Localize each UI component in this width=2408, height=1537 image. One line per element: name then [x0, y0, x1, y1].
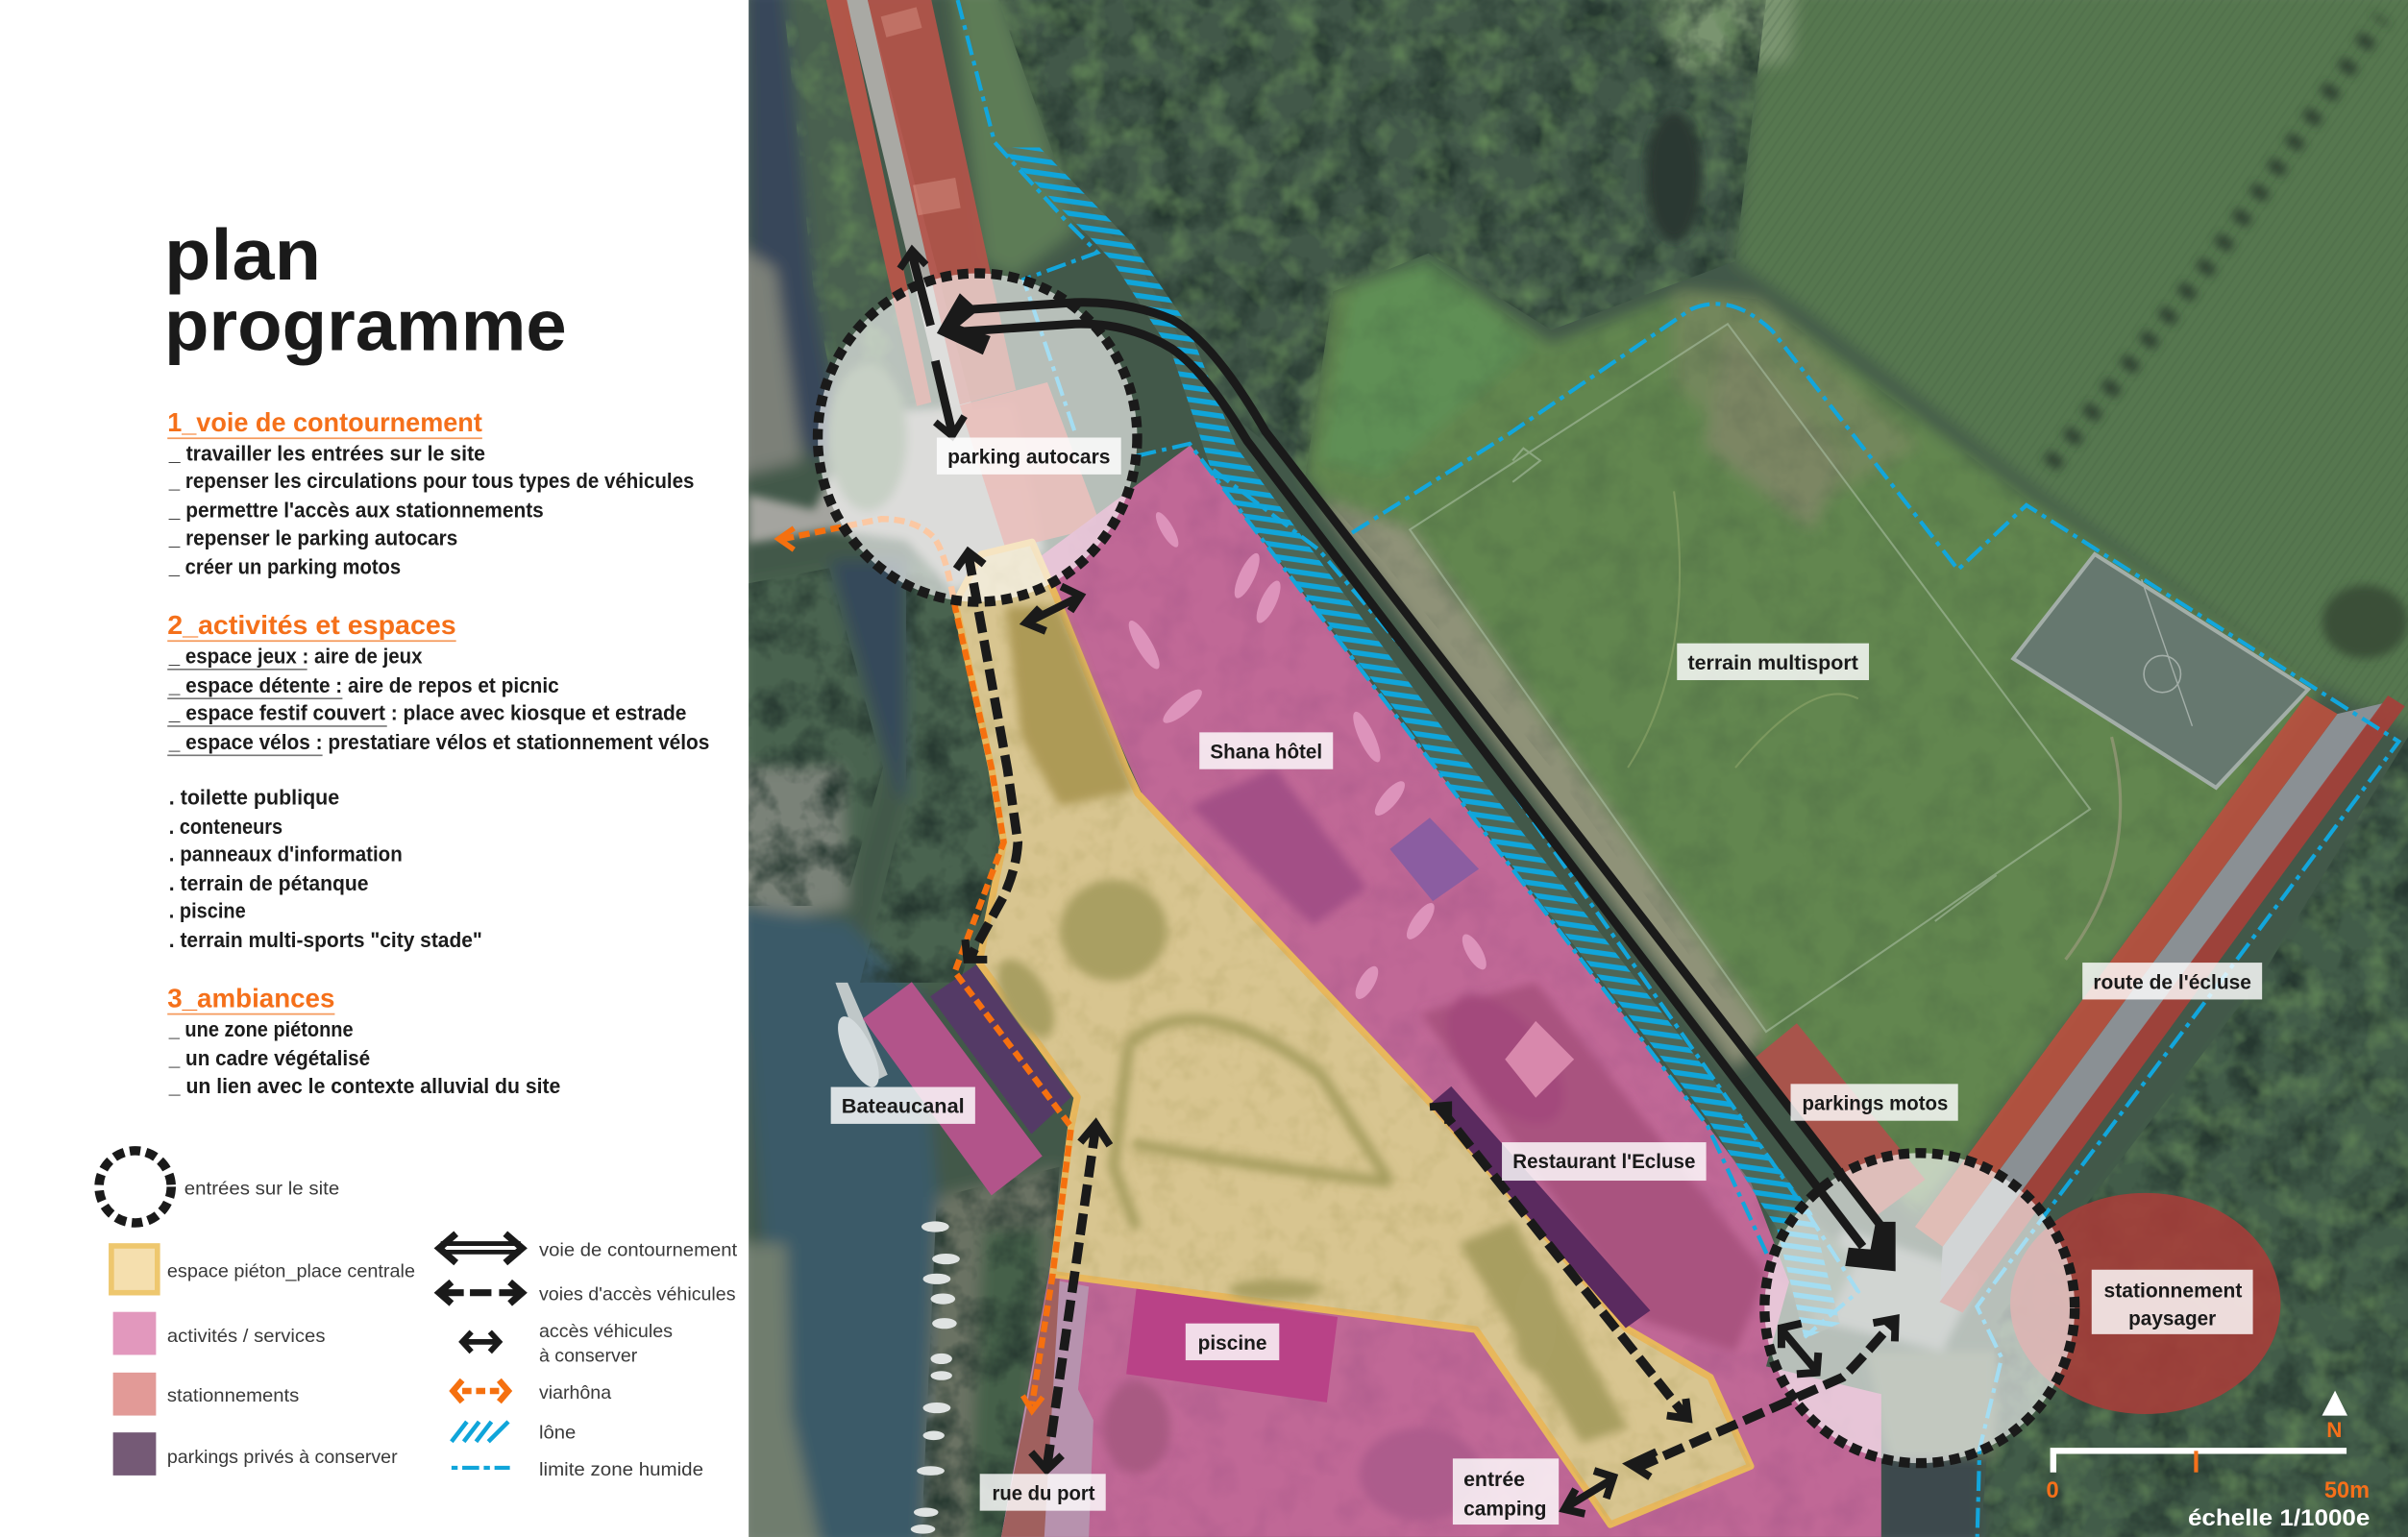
label: stationnement paysager	[2092, 1270, 2253, 1334]
marina boats and pier	[829, 983, 960, 1534]
stationnement zone: north road	[826, 0, 1101, 549]
arrowhead: north-west	[937, 293, 991, 354]
title: plan	[164, 214, 321, 295]
arrow: parking autocars	[900, 251, 965, 436]
legend	[99, 1151, 738, 1480]
text block: objectives: _ travailler les entrées sur le site	[168, 441, 485, 465]
label: parking autocars	[937, 438, 1121, 475]
label: Bateaucanal: Bateaucanal	[842, 1095, 965, 1118]
label: Shana hôtel	[1199, 732, 1333, 769]
heading: 2_activités et espaces	[167, 610, 456, 640]
zone: parking privé central	[930, 964, 1071, 1134]
crop field stripes and tree row	[1758, 0, 1795, 63]
text block: espaces	[167, 644, 709, 755]
legend: activités / services: activités / services	[167, 1327, 326, 1347]
text block: équipements: . toilette publique	[169, 785, 339, 809]
legend: viarhôna: viarhôna	[539, 1383, 611, 1403]
legend: accès véhicules à conserver: à conserver	[539, 1347, 638, 1367]
lône hatching	[999, 147, 1840, 1339]
section 1: voie de contournement	[167, 407, 694, 579]
legend: voie de contournement	[439, 1233, 738, 1263]
legend: lône	[452, 1422, 576, 1444]
title	[164, 214, 567, 365]
arrow: le long du restaurant	[1430, 1106, 1688, 1419]
legend: stationnements: stationnements	[167, 1386, 299, 1406]
heading: 3_ambiances	[167, 983, 334, 1012]
zone: parking privé restaurant	[1430, 1086, 1650, 1328]
zone: piscine	[1126, 1288, 1338, 1403]
text block: équipements: . piscine	[169, 899, 246, 923]
legend: lône: lône	[539, 1424, 576, 1444]
limite zone humide	[958, 0, 2398, 1537]
scale bar: 0	[2046, 1477, 2059, 1503]
panel: aerial map	[737, 0, 2408, 1537]
text block: espaces: _ espace festif couvert : place avec kiosque et estrade	[168, 701, 686, 725]
legend: parkings privés: parkings privés à conserver	[167, 1448, 398, 1468]
text block: objectives: _ repenser le parking autocars	[168, 525, 457, 549]
label: entrée camping: camping	[1463, 1497, 1546, 1520]
legend: espace piéton	[111, 1246, 415, 1293]
text block: objectives: _ permettre l'accès aux stationnements	[168, 499, 544, 523]
label: terrain multisport	[1677, 644, 1869, 680]
scale bar	[2046, 1451, 2370, 1531]
label: Restaurant l'Ecluse: Restaurant l'Ecluse	[1512, 1150, 1696, 1173]
legend: limite zone humide: limite zone humide	[539, 1460, 703, 1480]
label: stationnement paysager: stationnement	[2104, 1280, 2242, 1303]
aerial photo base	[737, 0, 2408, 1537]
scale bar: échelle 1/1000e	[2188, 1505, 2370, 1531]
title: programme	[164, 284, 567, 365]
legend: voie de contournement: voie de contournement	[539, 1240, 738, 1260]
label: parking autocars: parking autocars	[947, 446, 1111, 469]
arrow: entrée est	[1630, 1319, 1896, 1476]
text block: ambiances: _ une zone piétonne	[168, 1017, 354, 1041]
label: Shana hôtel: Shana hôtel	[1210, 741, 1322, 764]
label: rue du port	[980, 1474, 1106, 1511]
text block: espaces: _ espace jeux : aire de jeux	[168, 644, 423, 668]
zone: Bateaucanal	[863, 982, 1043, 1195]
legend: voies d'accès véhicules	[439, 1282, 736, 1305]
label: entrée camping	[1453, 1458, 1559, 1525]
label: route de l'écluse	[2082, 963, 2262, 999]
label: piscine: piscine	[1198, 1331, 1267, 1354]
legend: entrées sur le site	[99, 1151, 339, 1223]
multisport court	[2013, 554, 2308, 788]
activités / services zones	[1001, 445, 1881, 1537]
arrowhead: south-east	[1845, 1222, 1896, 1271]
label: rue du port: rue du port	[992, 1481, 1095, 1504]
section 2: activités et espaces	[167, 610, 709, 952]
label: terrain multisport: terrain multisport	[1687, 651, 1858, 674]
text block: équipements	[169, 785, 482, 952]
legend: parkings privés	[113, 1432, 398, 1476]
text block: espaces: _ espace détente : aire de repos et picnic	[168, 673, 559, 697]
accès véhicules à conserver	[1026, 587, 1818, 1514]
viarhôna route	[778, 519, 1071, 1411]
section 3: ambiances	[167, 983, 560, 1098]
label: Bateaucanal	[831, 1087, 975, 1124]
text block: objectives: _ repenser les circulations pour tous types de véhicules	[168, 469, 694, 493]
boats on hard-standing	[1123, 509, 1491, 1002]
label: Restaurant l'Ecluse	[1502, 1142, 1707, 1181]
vegetation on the square	[986, 606, 1628, 1443]
text block: équipements: . panneaux d'information	[169, 842, 403, 866]
legend: entrées sur le site: entrées sur le site	[184, 1179, 339, 1199]
label: entrée camping: entrée	[1463, 1468, 1525, 1491]
entry circle: route de l'écluse	[1764, 1153, 2075, 1463]
voies d'accès véhicules	[900, 251, 1896, 1476]
arrow: entrée est courte	[1781, 1324, 1818, 1374]
legend: activités / services	[113, 1312, 326, 1354]
scale bar: 50m	[2324, 1477, 2370, 1503]
arrow: Shana hôtel	[1026, 587, 1081, 631]
legend: accès véhicules à conserver	[462, 1322, 673, 1367]
building roofs	[1389, 817, 1479, 901]
label: parkings motos	[1791, 1084, 1958, 1121]
label: piscine	[1186, 1324, 1279, 1360]
label: route de l'écluse: route de l'écluse	[2093, 970, 2251, 993]
text block: objectives	[168, 441, 694, 579]
heading: 1_voie de contournement	[167, 407, 482, 437]
north arrow	[2322, 1391, 2347, 1442]
text block: équipements: . conteneurs	[169, 815, 283, 839]
legend: accès véhicules à conserver: accès véhicules	[539, 1322, 673, 1342]
legend: viarhôna	[453, 1380, 611, 1403]
espace piéton: place centrale	[955, 542, 1751, 1525]
label: parkings motos: parkings motos	[1803, 1092, 1948, 1115]
label: stationnement paysager: paysager	[2128, 1306, 2216, 1330]
legend: stationnements	[113, 1373, 299, 1416]
stationnement paysager circle	[2010, 1193, 2280, 1414]
text block: ambiances: _ un cadre végétalisé	[168, 1046, 370, 1070]
legend: voies d'accès véhicules: voies d'accès véhicules	[539, 1285, 736, 1305]
texture: tree canopy mottling	[998, 0, 1766, 476]
text block: équipements: . terrain de pétanque	[169, 871, 369, 895]
north arrow: N	[2326, 1418, 2342, 1442]
arrow: quai ouest	[956, 551, 1018, 960]
text block: ambiances: _ un lien avec le contexte alluvial du site	[168, 1074, 560, 1098]
entry circle: parking autocars	[818, 273, 1137, 602]
stationnement zone: route de l'écluse and motos	[1750, 695, 2405, 1312]
text block: objectives: _ créer un parking motos	[168, 555, 401, 579]
legend: espace piéton: espace piéton_place centrale	[167, 1262, 415, 1282]
voie de contournement	[937, 293, 1896, 1271]
text block: ambiances	[168, 1017, 560, 1098]
text block: espaces: _ espace vélos : prestatiare vélos et stationnement vélos	[168, 730, 709, 754]
text block: équipements: . terrain multi-sports "city stade"	[169, 928, 482, 952]
arrow: rue du port	[1031, 1124, 1110, 1470]
arrow: entrée camping	[1564, 1471, 1613, 1514]
entry circle overlays	[818, 273, 2075, 1463]
sports field lines	[1410, 324, 2121, 1032]
plaza and road under overlays	[748, 0, 2383, 1458]
